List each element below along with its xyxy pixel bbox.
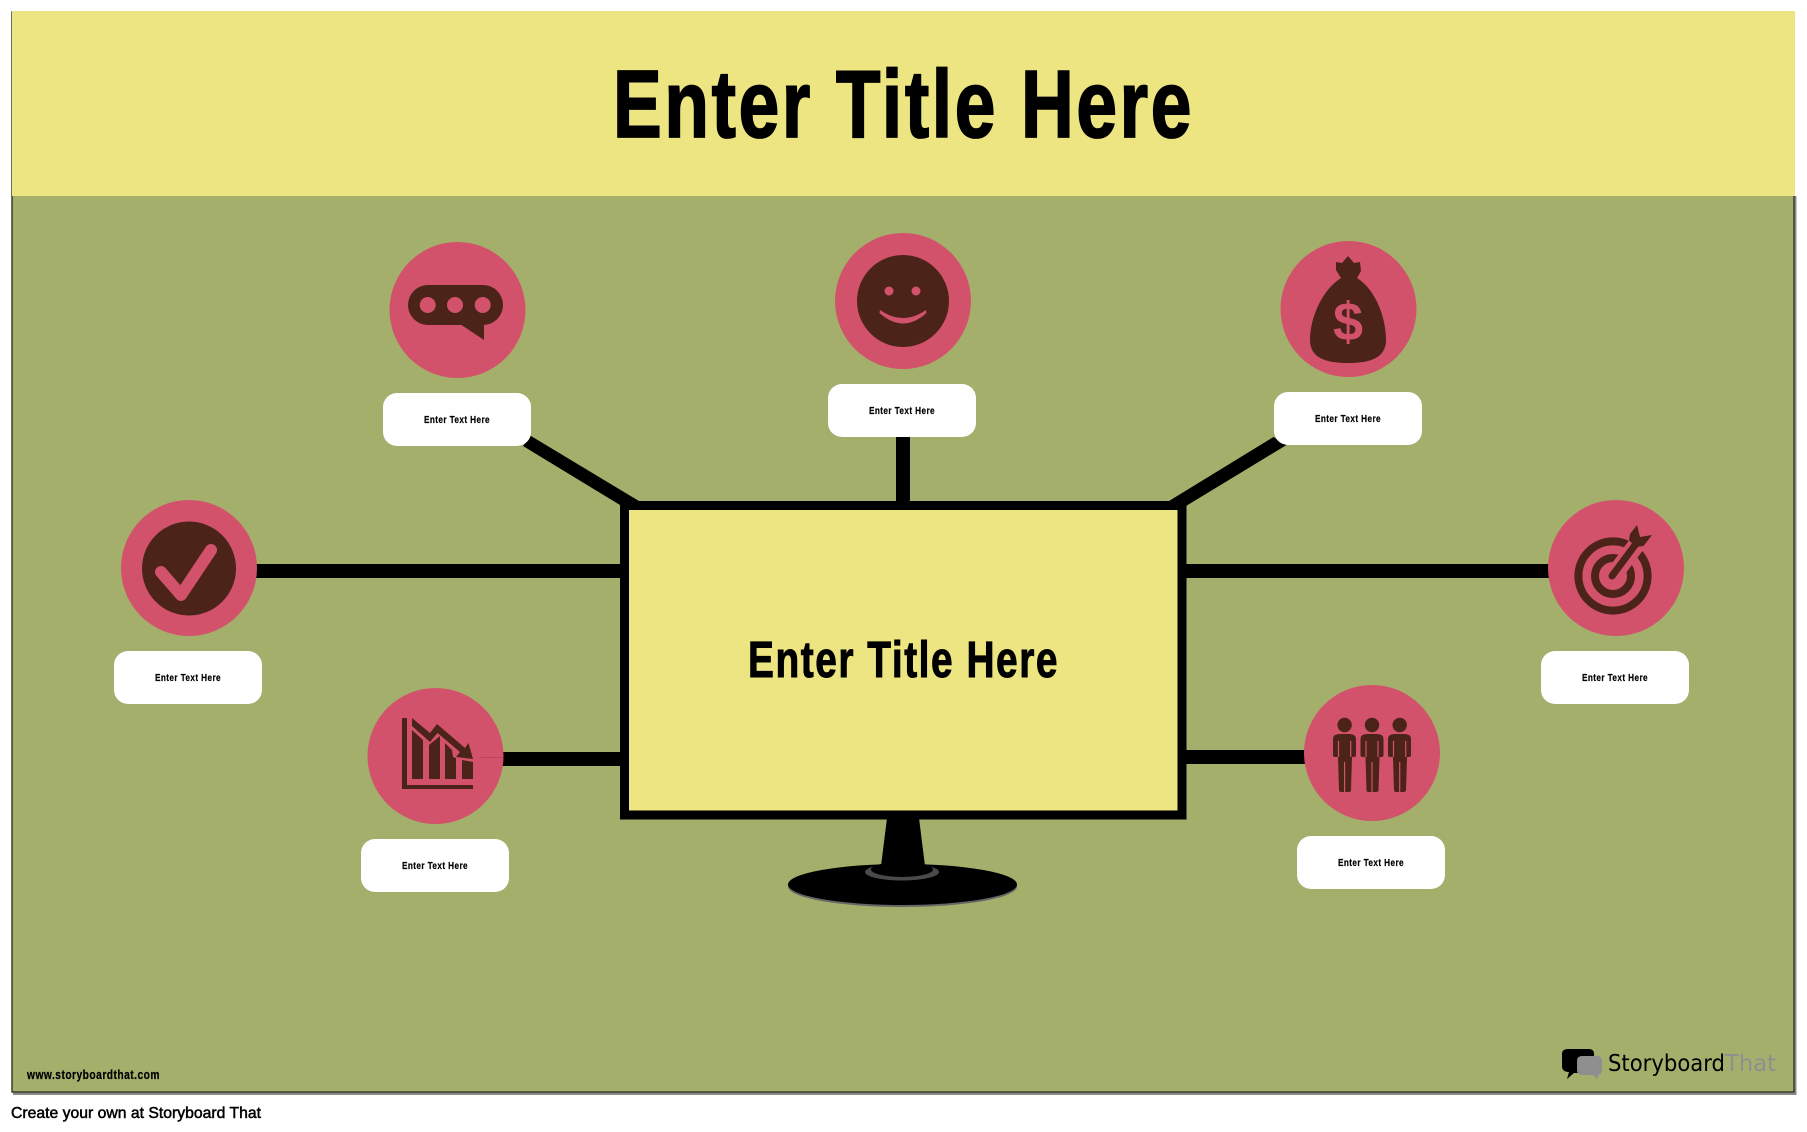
label box: check mark: Enter Text Here bbox=[155, 672, 221, 684]
label box: money bag: Enter Text Here bbox=[1315, 413, 1381, 425]
label box: declining bar chart bbox=[361, 839, 509, 892]
label box: speech bubble bbox=[383, 393, 531, 446]
icon: speech bubble bbox=[390, 242, 526, 378]
Storyboard That logo: That bbox=[1724, 1051, 1776, 1077]
icon: three people bbox=[1304, 685, 1440, 821]
Storyboard That logo: Storyboard bbox=[1608, 1051, 1725, 1077]
label box: check mark bbox=[114, 651, 262, 704]
label box: speech bubble: Enter Text Here bbox=[424, 414, 490, 426]
label box: smiley face bbox=[828, 384, 976, 437]
website url: www.storyboardthat.com bbox=[26, 1067, 160, 1082]
header band bbox=[12, 11, 1795, 196]
monitor stand and base bbox=[788, 818, 1017, 907]
icon: money bag bbox=[1280, 241, 1416, 377]
icon: money bag: $ bbox=[1333, 292, 1363, 352]
footer caption: Create your own at Storyboard That bbox=[11, 1105, 262, 1122]
label box: three people bbox=[1297, 836, 1445, 889]
icon: check mark bbox=[121, 500, 257, 636]
label box: three people: Enter Text Here bbox=[1338, 857, 1404, 869]
icon: smiley face bbox=[835, 233, 971, 369]
icon: target with arrow bbox=[1548, 500, 1684, 636]
label box: declining bar chart: Enter Text Here bbox=[402, 860, 468, 872]
title: Enter Title Here bbox=[613, 51, 1194, 158]
label box: smiley face: Enter Text Here bbox=[869, 405, 935, 417]
icon: declining bar chart bbox=[368, 688, 504, 824]
label box: target with arrow: Enter Text Here bbox=[1582, 672, 1648, 684]
label box: money bag bbox=[1274, 392, 1422, 445]
Storyboard That logo bbox=[1562, 1049, 1776, 1079]
central title: Enter Title Here bbox=[748, 631, 1059, 688]
connector lines bbox=[255, 436, 1550, 766]
label box: target with arrow bbox=[1541, 651, 1689, 704]
central monitor screen bbox=[624, 506, 1182, 815]
